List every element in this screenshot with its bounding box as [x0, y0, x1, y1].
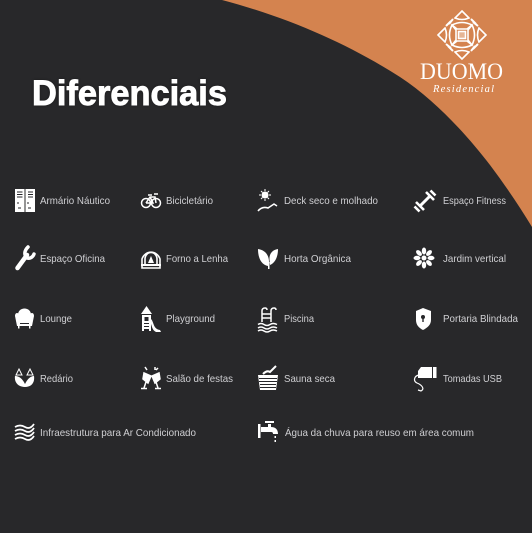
item: Redário: Redário [40, 373, 73, 385]
logo subtitle: Residencial [432, 84, 494, 95]
icon: wrench [18, 247, 34, 268]
item: Playground: Playground [166, 313, 215, 325]
icon: lockers [15, 189, 35, 212]
item: Armário Náutico: Armário Náutico [40, 195, 110, 207]
icon: pool ladder [258, 308, 277, 332]
item: Deck seco e molhado: Deck seco e molhado [284, 195, 378, 207]
item: Sauna seca [258, 366, 335, 390]
item: Bicicletário [142, 194, 213, 208]
item: Salão de festas: Salão de festas [166, 373, 233, 385]
item: Portaria Blindada [416, 308, 518, 330]
item: Sauna seca: Sauna seca [284, 373, 335, 385]
item: Salão de festas [141, 367, 233, 388]
item: Água da chuva para reuso em área comum: Água da chuva para reuso em área comum [285, 426, 474, 439]
item: Redário [15, 369, 73, 387]
icon: bicycle [142, 194, 160, 208]
item: Lounge: Lounge [40, 313, 72, 325]
item: Tomadas USB [415, 367, 502, 391]
item: Infraestrutura para Ar Condicionado: Infraestrutura para Ar Condicionado [40, 427, 196, 439]
item: Água da chuva para reuso em área comum [258, 421, 474, 442]
icon: armchair [15, 308, 34, 328]
icon: playground tower [141, 306, 161, 332]
logo: Duomo Residencial [420, 11, 503, 95]
item: Horta Orgânica [258, 249, 351, 269]
item: Piscina [258, 308, 314, 332]
icon: sun and lounger [258, 189, 277, 211]
item: Horta Orgânica: Horta Orgânica [284, 253, 351, 265]
item: Infraestrutura para Ar Condicionado [15, 424, 196, 440]
item: Espaço Fitness [414, 190, 506, 212]
icon: flower [414, 248, 434, 268]
icon: air waves [15, 424, 34, 440]
item: Deck seco e molhado [258, 189, 378, 211]
icon: water tap [258, 421, 278, 442]
title: Diferenciais [32, 74, 227, 113]
item: Espaço Fitness: Espaço Fitness [443, 195, 506, 207]
icon: wood oven [141, 252, 161, 268]
item: Forno a Lenha [141, 252, 228, 268]
icon: logo diamond [438, 11, 486, 59]
icon: champagne toast [141, 367, 161, 388]
item: Forno a Lenha: Forno a Lenha [166, 253, 228, 265]
title: Diferenciais [32, 74, 227, 113]
icon: USB plug [415, 367, 436, 391]
item: Jardim vertical [414, 248, 506, 268]
item: Tomadas USB: Tomadas USB [443, 373, 502, 385]
icon: sauna bucket [258, 366, 278, 390]
item: Lounge [15, 308, 72, 328]
item: Espaço Oficina [18, 247, 105, 268]
icon: leaves [258, 249, 278, 269]
icon: shield with keyhole [416, 308, 431, 330]
logo wordmark: DUOMO [420, 59, 503, 84]
icon: hammock [15, 369, 34, 387]
item: Armário Náutico [15, 189, 110, 212]
item: Espaço Oficina: Espaço Oficina [40, 253, 105, 265]
item: Portaria Blindada: Portaria Blindada [443, 313, 518, 325]
panel: orange corner [222, 0, 532, 227]
item: Piscina: Piscina [284, 313, 314, 325]
item: Bicicletário: Bicicletário [166, 195, 213, 207]
item: Playground [141, 306, 215, 332]
icon: dumbbell [414, 190, 436, 212]
item: Jardim vertical: Jardim vertical [443, 253, 506, 265]
